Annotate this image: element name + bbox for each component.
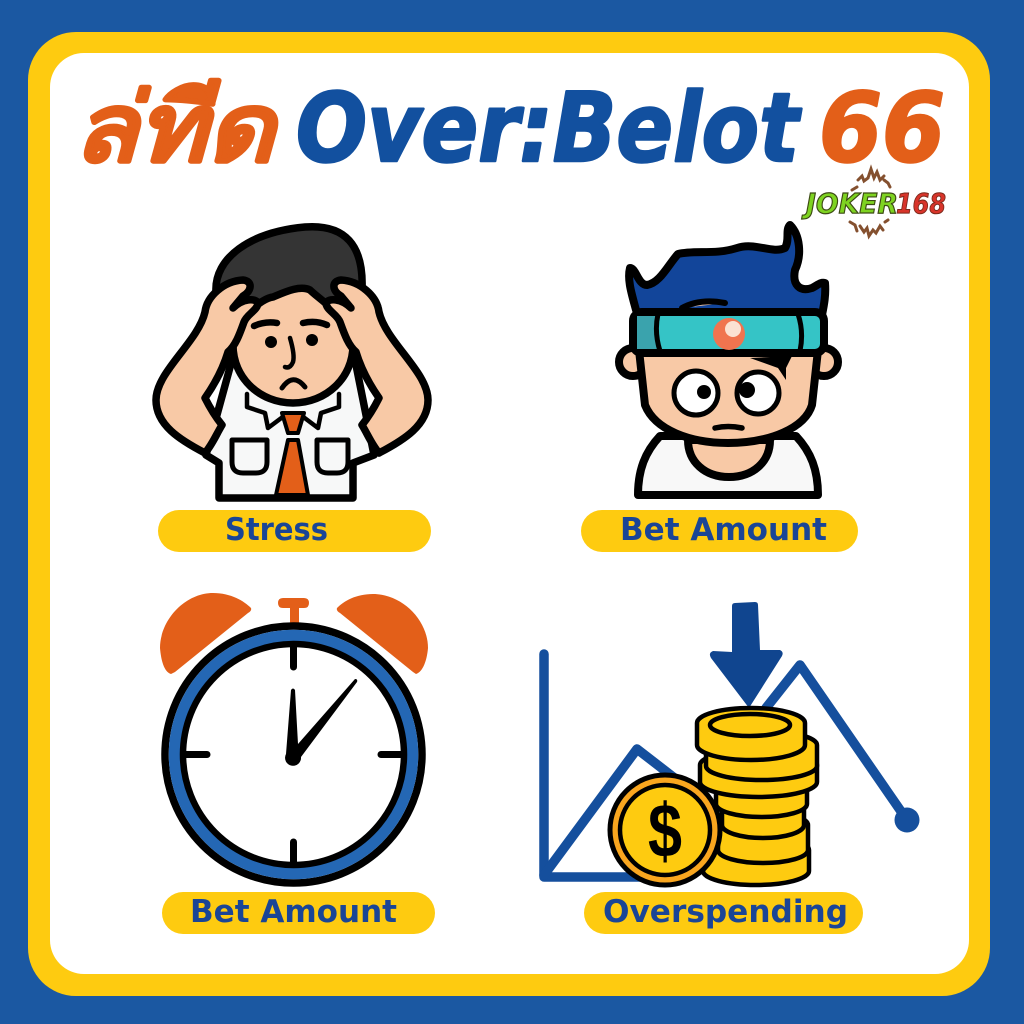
- dollar coin: [610, 775, 720, 885]
- label: Stress: Stress: [225, 512, 328, 548]
- icon: falling chart with coins: [544, 602, 920, 885]
- eyes: [674, 371, 718, 415]
- ears: [619, 348, 647, 376]
- headband: [633, 312, 824, 353]
- hands: [285, 679, 357, 766]
- label: Bet Amount (bottom): Bet Amount: [190, 894, 397, 930]
- dial: [165, 626, 422, 883]
- label: Bet Amount (top): Bet Amount: [620, 512, 827, 548]
- title: [73, 74, 945, 184]
- body: [638, 436, 818, 495]
- label: Bet Amount (bottom): [162, 892, 435, 934]
- headband gem: [713, 318, 745, 350]
- logo badge: [801, 169, 946, 236]
- bells: [160, 593, 428, 674]
- logo badge: 168: [896, 187, 946, 220]
- icon: falling chart with coins: $: [648, 789, 682, 874]
- logo badge: JOKER: [801, 187, 898, 220]
- face: [639, 350, 818, 443]
- collar: [247, 394, 339, 428]
- left arm and hand: [156, 280, 258, 453]
- icon: stressed man holding head: [156, 227, 428, 498]
- shirt: [206, 360, 374, 498]
- facial features: [254, 322, 327, 388]
- knob: [278, 598, 309, 626]
- right arm and hand: [326, 280, 428, 453]
- label: Stress: [158, 510, 431, 552]
- coin stack: [697, 708, 817, 885]
- hair: [216, 227, 362, 320]
- tie: [276, 413, 308, 495]
- ticks: [185, 645, 403, 864]
- icon: boy with headband: [619, 225, 838, 495]
- icon: alarm clock: [160, 593, 428, 883]
- pockets: [232, 440, 348, 473]
- title: ล่ทีด: [73, 74, 280, 184]
- label: Bet Amount (top): [581, 510, 858, 552]
- face: [233, 288, 353, 403]
- mouth: [715, 426, 742, 428]
- title: 66: [819, 74, 945, 184]
- title: Over:Belot: [296, 74, 802, 184]
- arrow: [710, 602, 783, 708]
- chart line: [544, 654, 907, 877]
- hair: [629, 225, 825, 315]
- neck: [688, 440, 770, 477]
- label: Overspending: Overspending: [603, 894, 848, 930]
